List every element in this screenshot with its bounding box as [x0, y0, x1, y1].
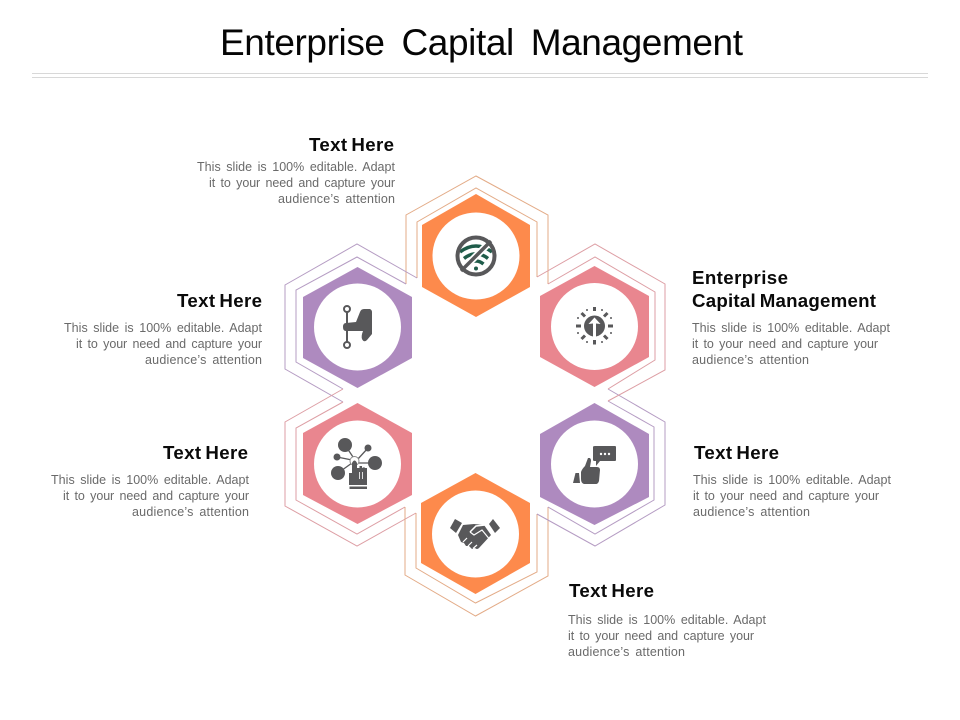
text block: bottom: it to your need and capture your	[568, 629, 754, 643]
text block: left upper	[64, 290, 263, 367]
text block: left lower: This slide is 100% editable. Adapt	[51, 473, 250, 487]
text block: top: Text Here	[309, 134, 394, 155]
title: Enterprise Capital Management	[220, 22, 744, 63]
icon: handshake	[450, 519, 500, 549]
text block: left lower	[51, 442, 250, 519]
icon: thumbs up with speech bubble	[573, 446, 616, 484]
text block: bottom: Text Here	[569, 580, 654, 601]
hexagon: left purple	[303, 267, 412, 388]
icon: node path with shape	[343, 306, 372, 348]
text block: top	[197, 134, 396, 206]
hexagon: bottom orange	[421, 473, 530, 594]
text block: right lower	[693, 442, 892, 519]
text block: left upper: it to your need and capture your	[76, 337, 262, 351]
text block: right upper: Enterprise	[692, 267, 788, 288]
hexagon: top orange	[422, 194, 530, 317]
icon: touch network	[331, 438, 382, 489]
text block: right lower: This slide is 100% editable. Adapt	[693, 473, 892, 487]
text block: left upper: This slide is 100% editable. Adapt	[64, 321, 263, 335]
text block: right lower: audience’s attention	[693, 505, 810, 519]
text block: left lower: audience’s attention	[132, 505, 249, 519]
text block: right lower: Text Here	[694, 442, 779, 463]
text block: left lower: it to your need and capture your	[63, 489, 249, 503]
text block: bottom: audience’s attention	[568, 645, 685, 659]
text block: right upper: Capital Management	[692, 290, 876, 311]
text block: left upper: audience’s attention	[145, 353, 262, 367]
text block: top: This slide is 100% editable. Adapt	[197, 160, 396, 174]
text block: right upper: it to your need and capture your	[692, 337, 878, 351]
text block: left lower: Text Here	[163, 442, 248, 463]
text block: right lower: it to your need and capture your	[693, 489, 879, 503]
text block: top: audience’s attention	[278, 192, 395, 206]
hexagon outlines	[285, 176, 665, 616]
hexagon: right pink	[540, 266, 649, 387]
text block: right upper: This slide is 100% editable. Adapt	[692, 321, 891, 335]
text block: bottom: This slide is 100% editable. Adapt	[568, 613, 767, 627]
icon: upload sun	[576, 307, 613, 344]
hexagon: lower-left pink	[303, 403, 412, 524]
hexagon: lower-right purple	[540, 403, 649, 525]
icon: no wifi	[458, 238, 494, 274]
text block: top: it to your need and capture your	[209, 176, 395, 190]
text block: right upper: audience’s attention	[692, 353, 809, 367]
text block: left upper: Text Here	[177, 290, 262, 311]
text block: right upper	[692, 267, 891, 367]
text block: bottom	[568, 580, 767, 659]
